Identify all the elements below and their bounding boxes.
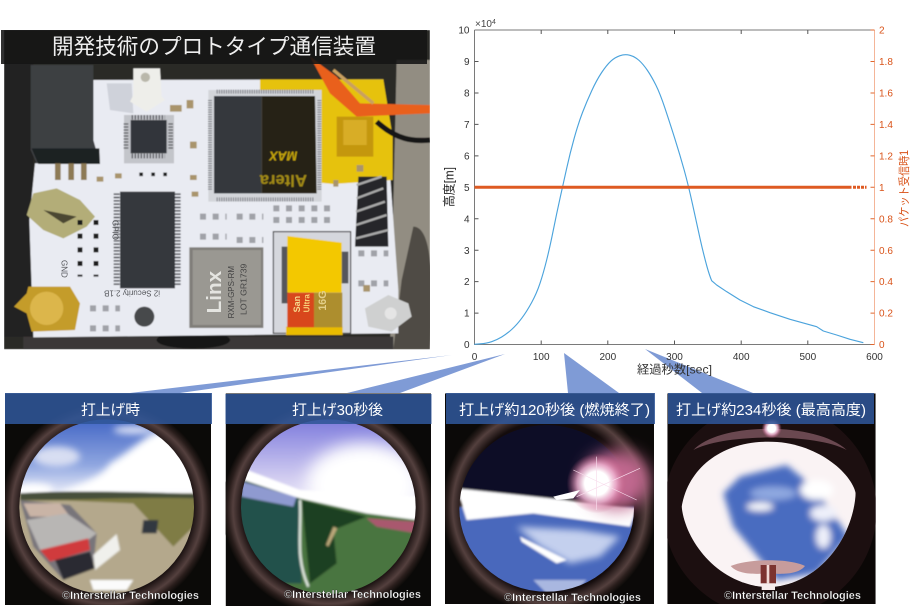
module label Linx: San [292,296,302,312]
GPIO holes [80,220,96,277]
y axis title: 高度[m] [442,167,456,207]
panel: at launch [1,393,213,612]
left axis tick labels: 10 [458,26,470,36]
bottom axis tick labels: 0 [472,352,478,363]
left axis tick labels: 7 [464,120,470,131]
board silkscreen: GND [60,260,69,278]
module label Linx: Ultra [302,294,311,312]
caption: 打上げ時 [81,402,140,419]
right axis tick labels: 0.2 [879,308,893,320]
credit: ©Interstellar Technologies [504,592,641,604]
bottom axis tick labels: 600 [866,352,883,363]
arrow: 234 seconds pointer [645,349,753,393]
board silkscreen: GPIO [111,220,120,240]
bottom axis tick labels: 400 [733,352,750,363]
gold SMA connector [14,287,80,332]
left axis tick labels: 2 [464,277,470,288]
panel: prototype communication device photo [1,30,432,349]
packet reception line [474,186,866,189]
title band [1,30,427,64]
exponent label: 4 [492,19,496,26]
module label Linx: RXM-GPS-RM [227,266,236,318]
secondary y axis title: パケット受信時1 [897,150,911,227]
caption band [226,394,432,424]
right axis tick labels: 1 [879,183,885,194]
photo: coastline fisheye [222,393,434,612]
right axis tick labels: 1.2 [879,152,893,162]
panel: about 234 seconds after launch [663,393,877,612]
arrow: 30 seconds pointer [347,354,505,393]
module label Linx: 16G [317,291,329,311]
pin header [355,177,388,247]
module label Linx: Linx [203,270,226,313]
left axis tick labels: 3 [464,246,470,257]
photo: circuit board: MAX [268,149,297,163]
exponent label: ×10 [475,19,492,30]
photo: launch site fisheye [1,393,213,612]
right axis tick labels: 1.6 [879,88,893,100]
right axis tick labels: 0 [879,340,885,351]
board silkscreen [60,220,160,298]
bottom axis tick labels: 300 [666,352,683,363]
caption band [668,393,874,424]
RJ style connector [31,65,100,163]
bottom axis tick labels: 500 [799,352,817,363]
title: 開発技術のプロトタイプ通信装置 [52,34,376,59]
wires and tape [310,57,430,117]
panel: 30 seconds after launch [222,393,434,612]
left axis tick labels: 5 [464,183,470,194]
chart: altitude and packet reception vs elapsed time [442,19,911,376]
altitude curve [474,55,863,344]
left axis tick labels: 8 [464,88,470,100]
caption: 打上げ30秒後 [292,402,384,419]
module label Linx [203,263,329,318]
right axis tick labels [879,26,893,351]
caption: 打上げ約234秒後 (最高高度) [676,402,866,419]
bottom axis tick labels: 200 [599,352,617,363]
x axis title: 経過秒数[sec] [637,362,712,376]
arrow: launch time pointer [130,355,452,393]
SD card [273,232,351,333]
standoffs [130,68,162,103]
left axis tick labels [458,26,470,351]
small MCU [124,115,174,163]
left axis tick labels: 4 [464,214,470,226]
photo: circuit board: Altera [259,171,307,190]
credit: ©Interstellar Technologies [62,590,199,602]
board silkscreen: i2 Security 2.1B [104,289,160,298]
right axis tick labels: 0.6 [879,246,893,257]
caption: 打上げ約120秒後 (燃焼終了) [459,401,650,419]
caption band [5,393,212,424]
bottom axis tick labels: 100 [533,352,550,363]
right axis tick labels: 0.8 [879,214,893,226]
panel: about 120 seconds after launch [442,393,657,612]
memory chip [117,193,178,287]
right axis tick labels: 1.8 [879,57,893,68]
right axis tick labels: 2 [879,26,885,36]
GPS module [189,247,263,328]
right axis tick labels: 1.4 [879,120,893,131]
credit: ©Interstellar Technologies [284,589,421,601]
credit: ©Interstellar Technologies [724,590,861,602]
main FPGA [208,90,322,202]
left axis tick labels: 0 [464,340,470,351]
arrow: 120 seconds pointer [564,353,619,393]
solder blob [27,188,95,238]
right axis tick labels: 0.4 [879,277,893,288]
module label Linx: LOT GR1739 [239,263,249,315]
photo: circuit board [4,30,432,349]
left axis tick labels: 6 [464,152,470,162]
caption band [446,393,655,424]
photo: burnout fisheye [442,393,657,612]
left axis tick labels: 9 [464,57,470,68]
axes frame [474,30,874,344]
bottom axis tick labels [472,352,883,363]
photo: apogee fisheye [663,393,877,612]
left axis tick labels: 1 [464,308,470,320]
